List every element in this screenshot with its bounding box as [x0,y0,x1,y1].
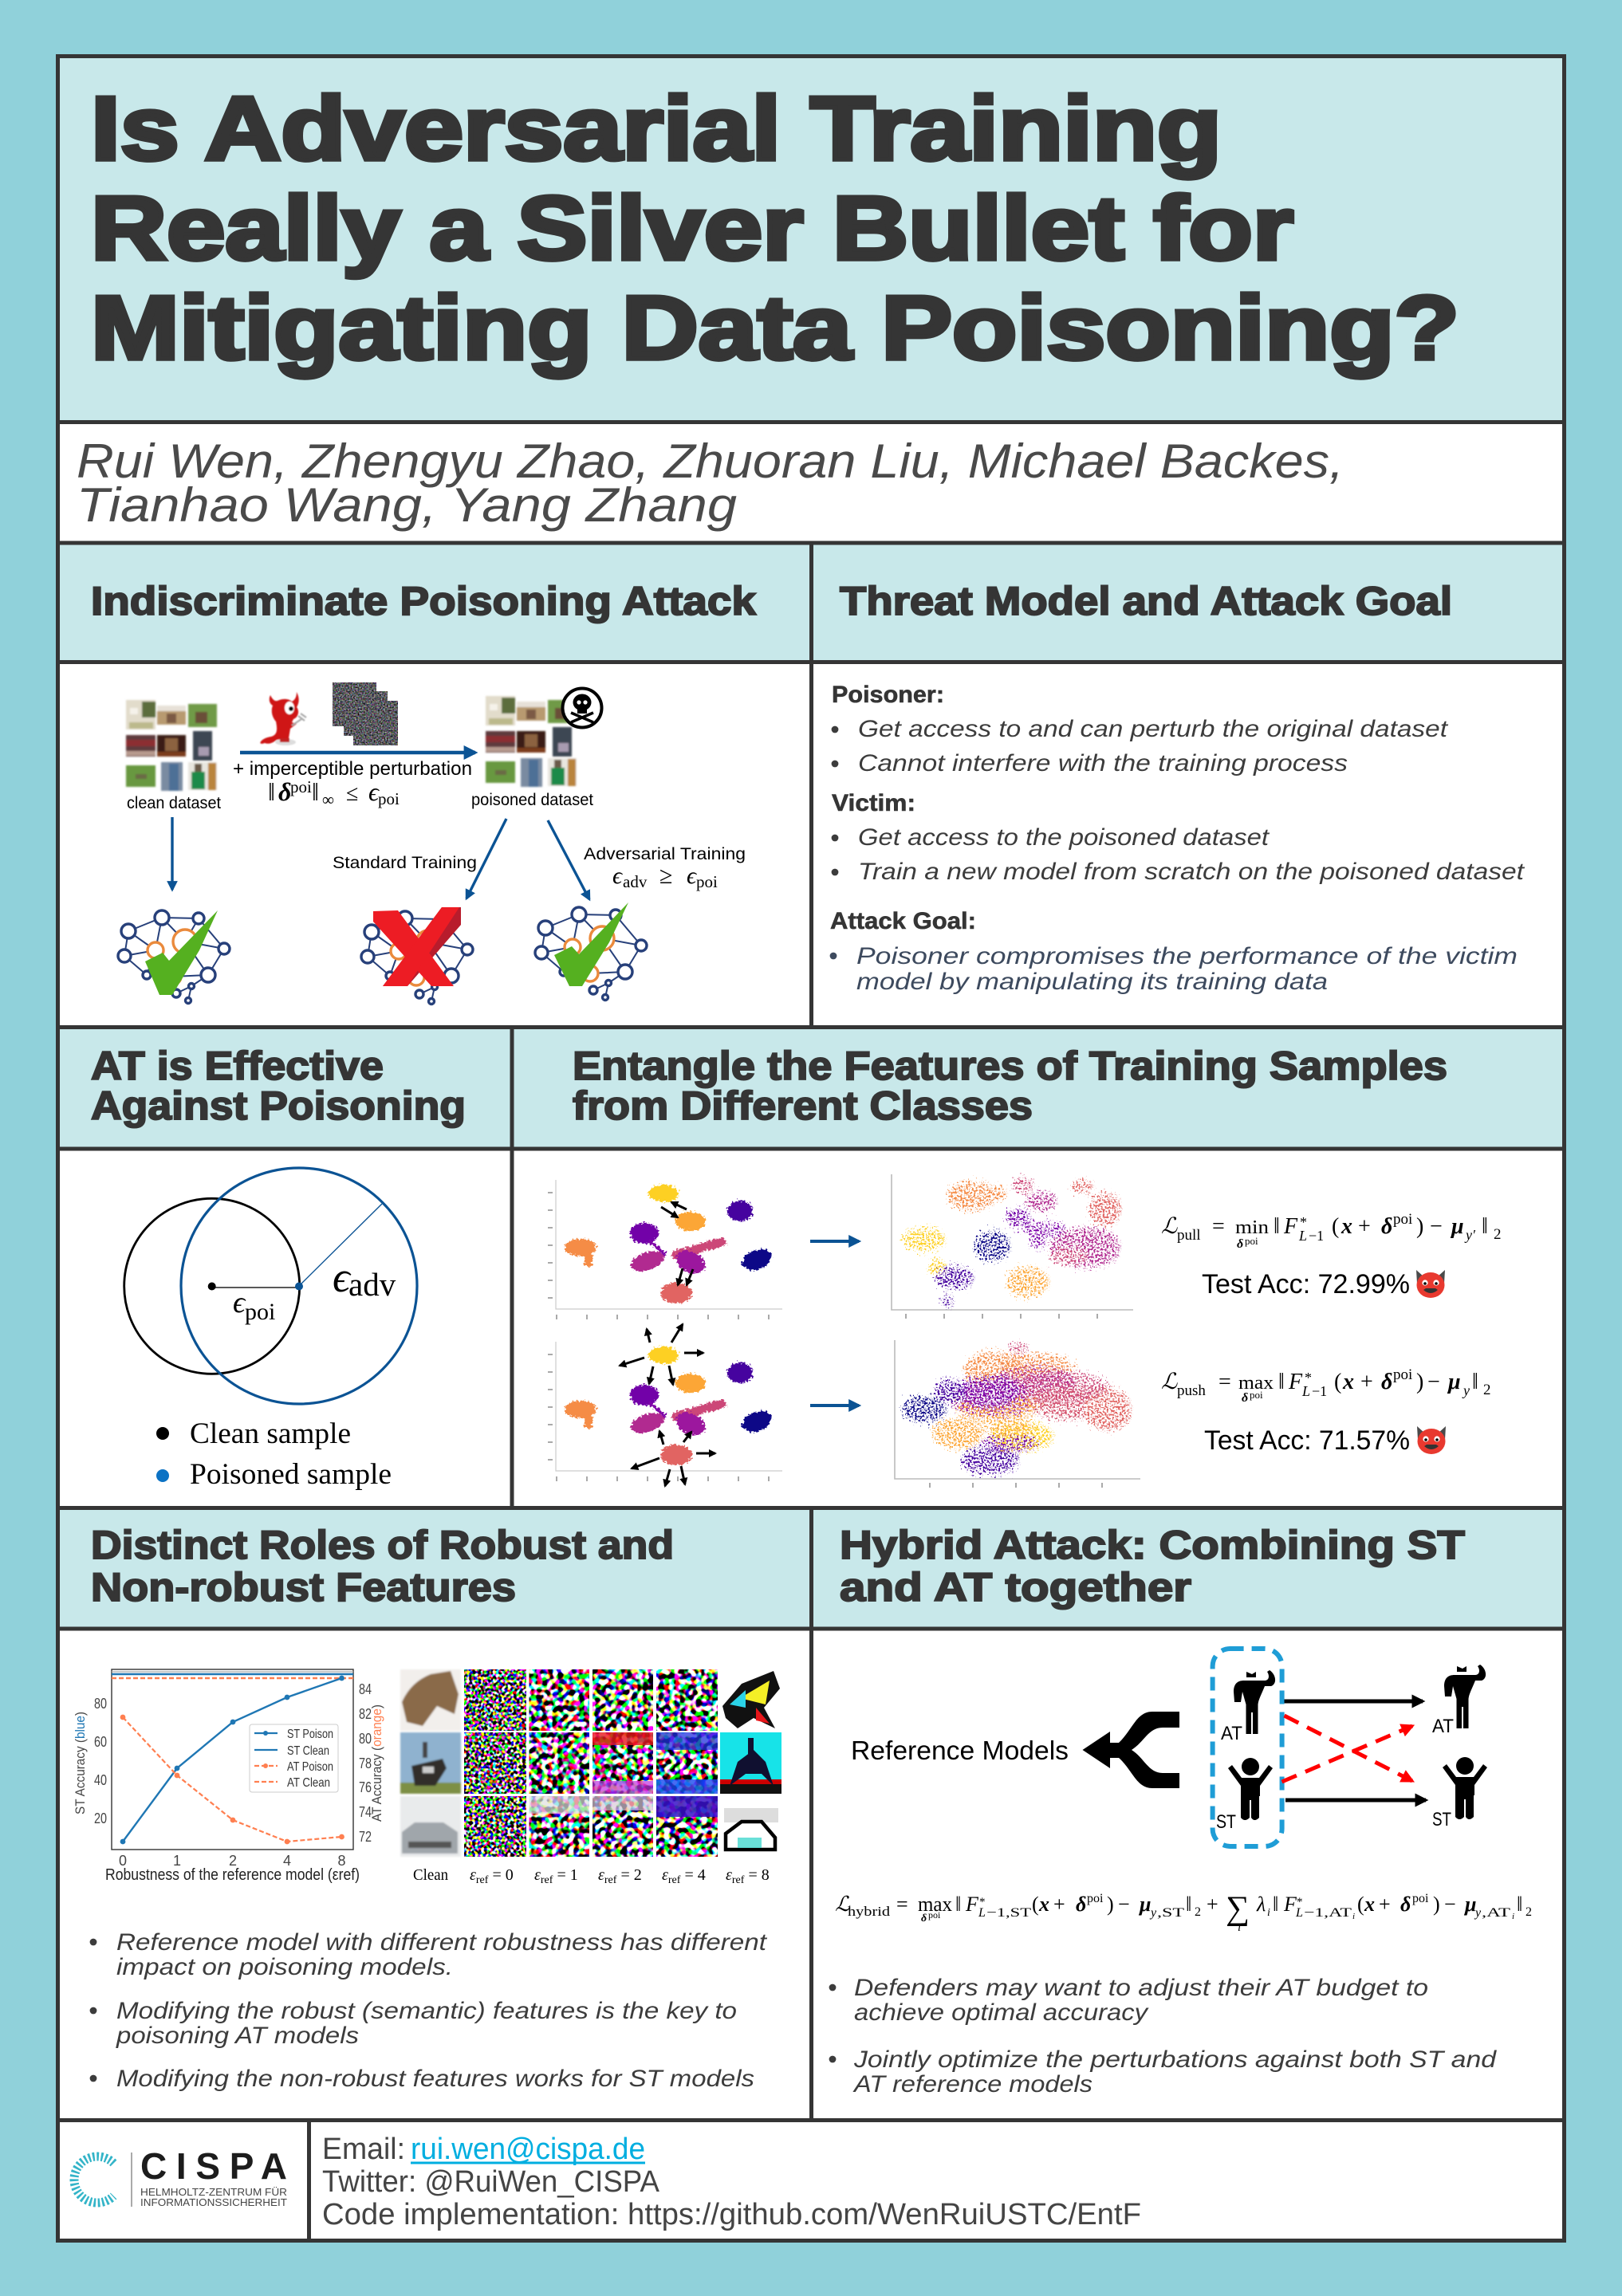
heading: Hybrid Attack [840,1523,1465,1610]
formula: hybrid loss: ‖ [955,1893,961,1916]
formula: pull loss [1161,1211,1501,1251]
red cross [373,907,461,986]
formula: pull loss: ‖ [1274,1214,1280,1239]
formula: pull loss: poi [1393,1211,1412,1228]
formula: pull loss: δ [1237,1237,1243,1251]
twitter: Twitter: @RuiWen_CISPA [322,2165,660,2199]
formula: pull loss: μ [1450,1214,1464,1239]
left axis ticks: 40 [94,1772,107,1788]
formula: pull loss: min [1235,1217,1269,1238]
formula: pull loss: ‖ [1482,1214,1488,1239]
left axis ticks: 60 [94,1734,107,1750]
label: epsilon adv: ϵ [333,1253,352,1301]
heading: Entangle the Features: Entangle the Features of Training Samples [573,1044,1447,1088]
arrow: poisoned to standard training [467,819,506,898]
formula: pull loss: − [1430,1214,1443,1239]
formula: adversarial budget: ϵ [612,863,624,889]
label: epsilon poi [233,1286,275,1325]
email: Email: [322,2133,405,2166]
logo ring [74,2156,113,2203]
formula: pull loss: ) [1416,1214,1423,1239]
right axis ticks: 76 [359,1779,372,1795]
bullets: victim [832,824,1526,885]
image grid column labels: ε [662,1866,668,1884]
image grid column labels: = 2 [616,1866,642,1884]
right axis label: AT Accuracy (orange) [369,1704,384,1822]
poisoned dataset image tiles [486,696,577,787]
heading: Distinct Roles: Distinct Roles of Robust and [91,1523,674,1567]
x axis ticks: 8 [337,1853,346,1869]
icon: red devil mascot [260,692,306,745]
formula: perturbation bound: ϵ [368,777,380,806]
formula: push loss: −1 [1312,1383,1327,1399]
legend: ST Poison [287,1728,333,1741]
legend: AT Clean [287,1776,330,1790]
formula: adversarial budget: adv [623,872,648,891]
formula: push loss: ‖ [1472,1370,1478,1394]
bullets: hybrid attack: achieve optimal accuracy [854,1999,1149,2026]
formula: hybrid loss: ) [1433,1893,1440,1916]
radius lines and points [208,1204,382,1290]
t-SNE poisoned clusters: pull [892,1174,1133,1316]
formula: hybrid loss: ) [1107,1893,1114,1916]
label: epsilon adv: adv [348,1266,396,1303]
heading: Entangle the Features [573,1044,1447,1128]
formula: hybrid loss: poi [1087,1892,1104,1905]
push arrows [620,1324,715,1486]
arrow: merge to reference models [1083,1712,1179,1788]
image grid [400,1669,781,1857]
perturbed images, epsilon 0 to 8 [464,1669,781,1857]
image grid column labels [413,1866,770,1886]
bullets: distinct roles: Modifying the robust (semantic) features is the key to [116,1998,737,2024]
subheading: Poisoner: Poisoner: [832,682,944,708]
formula: perturbation bound: poi [290,777,312,796]
formula: perturbation bound: ≤ [346,781,358,806]
label: reference models: Reference Models [851,1736,1069,1765]
panel: entangle features [550,1174,1501,1486]
formula: hybrid loss: ,AT [1482,1906,1510,1920]
formula: push loss: ( [1334,1370,1341,1394]
formula: hybrid loss: y [1474,1906,1482,1920]
formula: pull loss: = [1212,1214,1225,1239]
formula: hybrid loss: y [1149,1906,1157,1920]
label: AT target: AT [1432,1716,1454,1737]
clean dataset image tiles [126,700,217,791]
formula: hybrid loss: i [1512,1912,1514,1921]
image grid column labels: ε [534,1866,541,1884]
series: AT clean [112,1677,353,1679]
formula: hybrid loss: x [1038,1893,1049,1916]
network with check: adversarial training [535,907,647,1000]
heading: Threat Model and Attack Goal: Threat Model and Attack Goal [840,579,1452,623]
label: poisoned dataset: poisoned dataset [471,791,593,809]
panel: indiscriminate poisoning attack diagram [118,682,746,1005]
formula: hybrid loss: δ [1076,1893,1086,1916]
formula: hybrid loss: ‖ [1273,1893,1278,1916]
subheading: Victim: Victim: [832,790,915,816]
formula: hybrid loss: F [1283,1893,1297,1916]
figure: AT target [1444,1665,1486,1728]
formula: hybrid loss: −1,AT [1304,1906,1352,1920]
label: adversarial training: Adversarial Training [584,845,746,863]
bullets: poisoner: Cannot interfere with the training process [858,750,1348,776]
panel: epsilon balls diagram [124,1168,417,1491]
x axis ticks: 0 [119,1853,127,1869]
heading: AT is Effective Against Poisoning: Against Poisoning [91,1083,466,1128]
formula: pull loss: + [1358,1214,1371,1239]
formula: hybrid loss: + [1053,1893,1065,1916]
panel: threat model text [830,682,1526,995]
formula: hybrid loss: μ [1463,1893,1476,1916]
icon: devil emoji [1416,1270,1445,1298]
formula: hybrid loss: ,ST [1157,1906,1184,1920]
image grid column labels: Clean [413,1866,448,1884]
bullets: distinct roles: Modifying the non-robust features works for ST models [116,2066,754,2092]
formula: hybrid loss: ℒ [835,1893,851,1917]
series: AT poison [120,1715,344,1844]
series: ST clean [112,1673,353,1675]
black circle: poison budget [124,1198,300,1374]
heading: Indiscriminate Poisoning Attack: Indiscriminate Poisoning Attack [91,579,756,623]
bullets: hybrid attack: AT reference models [852,2071,1092,2097]
arrow: ST to AT dashed red [1282,1726,1412,1782]
formula: hybrid loss: + [1207,1893,1218,1916]
image grid column labels: ε [598,1866,604,1884]
logo subtitle: INFORMATIONSSICHERHEIT [140,2197,287,2208]
formula: push loss: + [1360,1370,1373,1394]
formula: pull loss: * [1300,1214,1307,1230]
email: rui.wen@cispa.de [411,2133,645,2166]
formula: push loss: = [1218,1370,1231,1394]
formula: pull loss: pull [1177,1227,1201,1244]
bullets: victim: Train a new model from scratch on the poisoned dataset [858,859,1526,885]
formula: hybrid loss: * [1297,1896,1303,1909]
bullets: victim: Get access to the poisoned dataset [858,824,1270,851]
formula: hybrid loss: μ [1138,1893,1151,1916]
x axis ticks: 4 [283,1853,291,1869]
authors: Tianhao Wang, Yang Zhang [77,478,737,532]
left axis ticks [94,1696,107,1826]
panel: hybrid attack [829,1649,1532,2097]
right axis ticks [359,1681,372,1845]
legend: AT Poison [287,1760,333,1774]
right axis ticks: 80 [359,1731,372,1747]
pull arrows [661,1202,693,1285]
arrow: push result [810,1404,859,1407]
formula: pull loss: L [1298,1228,1307,1244]
image grid column labels: ref [541,1874,553,1886]
bullets: distinct roles: Reference model with different robustness has different [116,1929,768,1956]
panel: distinct roles [73,1669,781,2092]
formula: pull loss: x [1341,1214,1352,1239]
formula: hybrid loss: ( [1032,1893,1039,1916]
code link: Code implementation: https://github.com/WenRuiUSTC/EntF [322,2198,1141,2231]
logo subtitle [140,2187,287,2208]
formula: hybrid loss: ‖ [1517,1893,1522,1916]
figure: AT model [1234,1670,1275,1734]
formula: perturbation bound: ∞ [322,790,334,809]
authors: Rui Wen, Zhengyu Zhao, Zhuoran Liu, Michael Backes, [77,434,1344,488]
checkmark 2 [554,902,628,986]
right axis ticks: 82 [359,1706,372,1722]
formula: push loss: y [1462,1382,1470,1398]
image grid column labels: ref [732,1874,745,1886]
legend: Poisoned sample [190,1458,392,1491]
label: clean dataset: clean dataset [127,794,221,812]
image grid column labels: ε [470,1866,476,1884]
formula: hybrid loss: poi [928,1909,941,1921]
label: AT: AT [1221,1723,1242,1744]
formula: hybrid loss: −1,ST [986,1906,1031,1920]
formula: adversarial budget: ≥ [659,863,672,889]
formula: hybrid loss: 2 [1195,1905,1201,1919]
title: Really a Silver Bullet for [91,178,1293,278]
formula: push loss: max [1238,1373,1274,1394]
arrow: poisoned to adversarial training [548,820,589,899]
label: ST: ST [1216,1811,1236,1833]
x axis ticks [119,1853,346,1869]
formula: push loss: F [1288,1370,1303,1394]
right axis ticks: 72 [359,1829,372,1845]
image grid column labels: ref [476,1874,489,1886]
heading: AT is Effective Against Poisoning: AT is Effective [91,1044,384,1088]
bullets: hybrid attack: Jointly optimize the perturbations against both ST and [853,2046,1497,2073]
t-SNE poisoned clusters: push [895,1340,1140,1485]
image grid column labels: ε [726,1866,732,1884]
figure: ST target [1443,1757,1487,1819]
formula: hybrid loss: − [1118,1893,1130,1916]
subheading: Attack Goal: Attack Goal: [830,908,976,934]
formula: push loss: − [1427,1370,1440,1394]
heading: Entangle the Features: from Different Classes [573,1083,1033,1128]
title: Mitigating Data Poisoning? [91,277,1459,378]
formula: hybrid loss: − [1444,1893,1456,1916]
series: ST poison [120,1676,344,1844]
left axis ticks: 20 [94,1810,107,1826]
formula: push loss: * [1305,1370,1312,1386]
label: ST target: ST [1432,1809,1451,1830]
image grid column labels: = 4 [680,1866,706,1884]
legend [250,1724,338,1792]
formula: push loss: μ [1447,1370,1461,1394]
clean images [400,1669,461,1857]
network with red cross: standard training [361,911,473,1005]
formula: pull loss: −1 [1309,1228,1324,1244]
arrow: pull result [810,1240,859,1243]
title [91,78,1459,378]
formula: hybrid loss: ∑ [1226,1890,1250,1927]
image grid column labels: ref [668,1874,681,1886]
formula: hybrid loss: L [1295,1906,1303,1920]
formula: hybrid loss: x [1364,1893,1375,1916]
x axis ticks: 1 [173,1853,181,1869]
formula: hybrid loss: L [978,1906,986,1920]
logo: CISPA [74,2145,287,2208]
text: test accuracy 72.99: Test Acc: 72.99% [1202,1269,1410,1299]
right axis ticks: 78 [359,1755,372,1771]
formula: hybrid loss: poi [1412,1892,1429,1905]
bullets: poisoner: Get access to and can perturb the original dataset [858,716,1449,742]
formula: adversarial budget: poi [696,872,718,891]
arrow: AT to ST dashed red [1284,1716,1412,1781]
text: test accuracy 71.57: Test Acc: 71.57% [1204,1425,1410,1456]
logo wordmark: CISPA [140,2145,287,2187]
bullet: attack goal: Poisoner compromises the performance of the victim [856,943,1518,969]
figure: ST model [1228,1758,1273,1820]
formula: pull loss: y′ [1464,1227,1476,1243]
x axis ticks: 2 [229,1853,237,1869]
formula: push loss: δ [1242,1391,1248,1405]
checkmark 1 [145,910,218,995]
formula: perturbation bound [268,777,400,809]
arrow: clean to network [171,817,174,890]
left axis label: ST Accuracy (blue) [73,1712,88,1814]
formula: perturbation bound: ‖ [312,777,319,806]
formula: hybrid loss: λ [1256,1893,1266,1916]
formula: push loss: poi [1393,1366,1412,1383]
x axis label: Robustness of the reference model (εref) [105,1866,360,1884]
label: standard training: Standard Training [333,854,477,872]
label: epsilon poi: ϵ [233,1286,246,1319]
formula: pull loss: 2 [1494,1226,1501,1243]
formula: hybrid loss: = [896,1893,908,1916]
left axis ticks: 80 [94,1696,107,1712]
blue circle: adversarial budget [181,1168,417,1404]
legend: Clean sample [190,1417,351,1450]
network with check: clean [118,910,230,1003]
icon: skull badge [563,689,601,727]
arrow: add perturbation [240,751,475,754]
formula: pull loss: ( [1332,1214,1339,1239]
title: Is Adversarial Training [91,78,1222,179]
formula: push loss: ‖ [1278,1370,1285,1394]
formula: perturbation bound: poi [378,789,400,808]
heading: Hybrid Attack: Hybrid Attack: Combining ST [840,1523,1465,1567]
bullets: distinct roles [90,1929,768,2092]
formula: push loss: 2 [1483,1382,1491,1398]
formula: hybrid loss: max [918,1893,952,1916]
formula: push loss [1161,1366,1491,1405]
formula: push loss: x [1342,1370,1354,1394]
formula: hybrid loss: hybrid [848,1904,891,1919]
formula: adversarial budget: ϵ [687,863,698,889]
authors [77,434,1344,532]
right axis ticks: 84 [359,1681,372,1697]
bullets: distinct roles: impact on poisoning models. [116,1954,453,1980]
formula: perturbation bound: δ [278,777,291,806]
formula: perturbation bound: ‖ [268,777,275,806]
formula: push loss: ℒ [1161,1368,1178,1394]
arrow: ST to ST [1285,1799,1426,1802]
legend: ST Clean [287,1744,329,1758]
formula: hybrid loss: * [979,1896,986,1909]
heading: Hybrid Attack: and AT together [840,1565,1191,1610]
formula: hybrid loss: i [1352,1912,1355,1921]
bullets: distinct roles: poisoning AT models [116,2023,359,2049]
formula: push loss: L [1301,1383,1310,1399]
formula: push loss: δ [1381,1370,1392,1394]
formula: push loss: push [1177,1382,1206,1399]
image grid column labels: = 1 [553,1866,578,1884]
image grid column labels: = 0 [488,1866,514,1884]
contact details [322,2133,1141,2231]
formula: hybrid loss: i [1238,1921,1241,1934]
formula: hybrid loss [835,1890,1532,1934]
bullet: attack goal: model by manipulating its training data [856,969,1328,995]
bullet: attack goal [830,943,1518,995]
formula: hybrid loss: δ [921,1913,927,1924]
bullets: hybrid attack [829,1975,1497,2097]
heading: Distinct Roles [91,1523,674,1610]
dashed box: reference pair [1213,1649,1282,1846]
bullets: poisoner [832,716,1449,776]
label: epsilon poi: poi [245,1299,275,1325]
label: imperceptible perturbation: + imperceptible perturbation [233,758,472,780]
arrow: AT to AT [1284,1700,1423,1703]
formula: push loss: poi [1250,1389,1263,1401]
t-SNE clean clusters: pull [550,1180,782,1317]
heading: Distinct Roles: Non-robust Features [91,1565,516,1610]
bullets: hybrid attack: Defenders may want to adjust their AT budget to [854,1975,1428,2001]
icon: devil emoji 2 [1417,1426,1446,1454]
formula: push loss: ) [1416,1370,1423,1394]
image grid column labels: ref [604,1874,617,1886]
line chart [73,1669,384,1884]
formula: adversarial budget [612,863,718,891]
formula: pull loss: F [1283,1214,1298,1239]
perturbation noise stack [333,682,398,745]
formula: hybrid loss: i [1267,1907,1270,1919]
formula: hybrid loss: δ [1400,1893,1411,1916]
formula: hybrid loss: + [1379,1893,1391,1916]
formula: hybrid loss: ( [1357,1893,1364,1916]
formula: hybrid loss: F [965,1893,979,1916]
label: epsilon adv [333,1253,396,1303]
t-SNE clean clusters: push [550,1342,782,1479]
right axis ticks: 74 [359,1804,372,1820]
formula: pull loss: ℒ [1161,1213,1178,1239]
heading: AT is Effective Against Poisoning [91,1044,466,1128]
formula: hybrid loss: ‖ [1186,1893,1191,1916]
formula: hybrid loss: 2 [1526,1905,1532,1919]
image grid column labels: = 8 [744,1866,770,1884]
formula: pull loss: poi [1245,1235,1258,1247]
legend [156,1417,392,1491]
formula: pull loss: δ [1381,1214,1392,1239]
logo subtitle: HELMHOLTZ-ZENTRUM FÜR [140,2187,287,2198]
